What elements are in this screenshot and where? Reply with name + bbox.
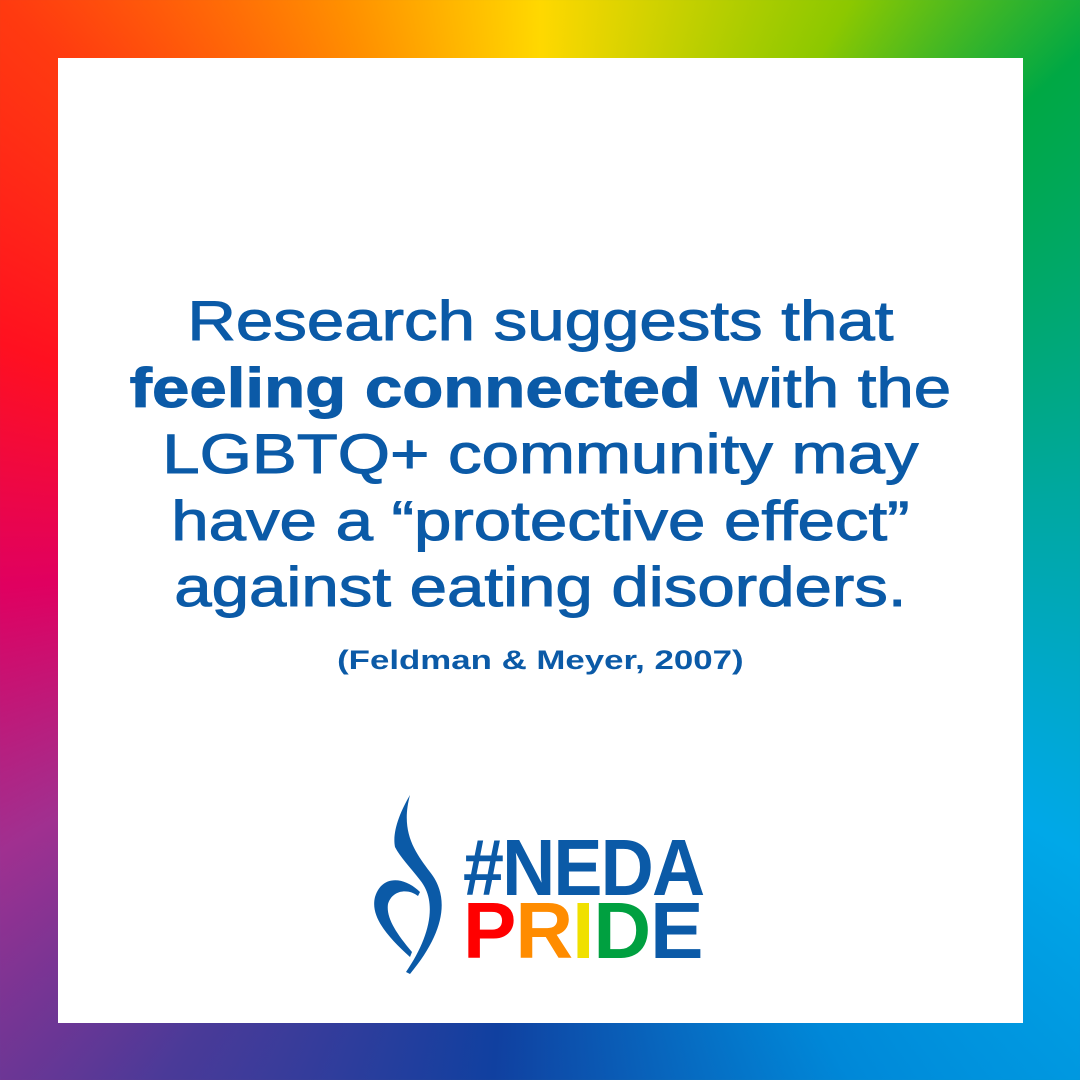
main quote text: LGBTQ+ community may bbox=[162, 422, 918, 485]
main quote text: Research suggests that bbox=[187, 289, 893, 352]
citation: (Feldman & Meyer, 2007) bbox=[337, 645, 744, 675]
main quote text: have a “protective effect” bbox=[171, 488, 910, 552]
text: #NEDA: #NEDA bbox=[463, 823, 703, 912]
logo: NEDA pride bbox=[374, 795, 704, 975]
text: PRIDE: PRIDE bbox=[463, 886, 703, 975]
main quote text: against eating disorders. bbox=[174, 555, 906, 618]
panel: white card bbox=[58, 58, 1023, 1023]
main quote text: feeling connected with the bbox=[130, 356, 951, 418]
icon: swoosh figure bbox=[374, 795, 442, 974]
main quote text bbox=[130, 289, 951, 618]
